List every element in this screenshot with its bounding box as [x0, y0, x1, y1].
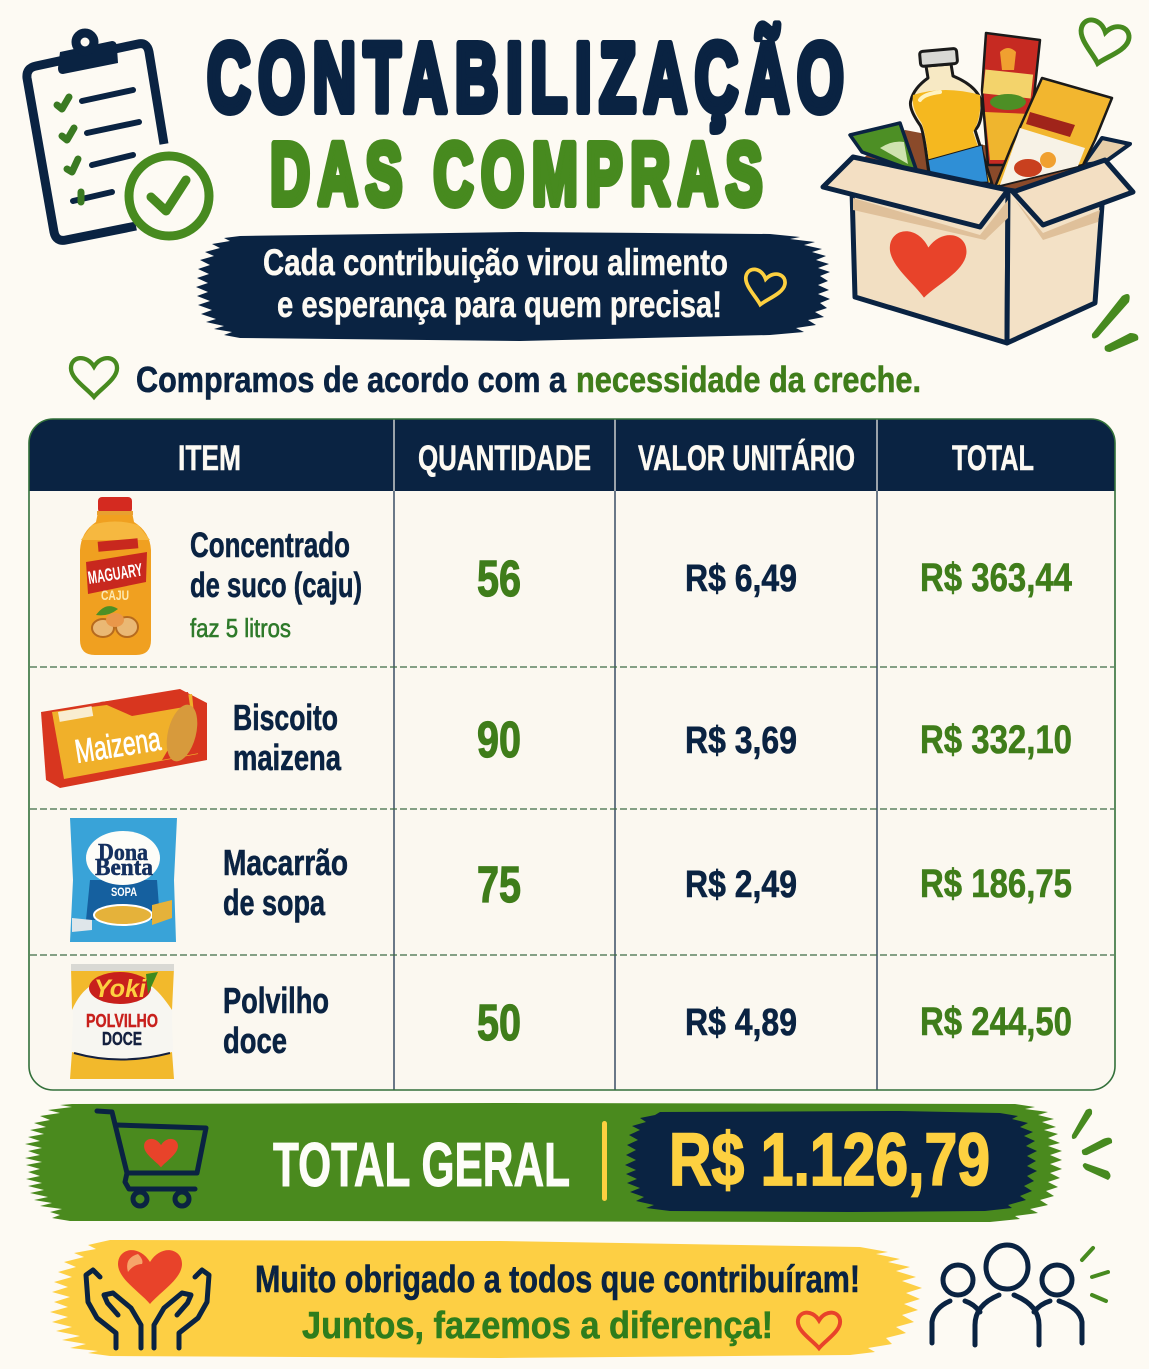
row: polvilho doce: R$ 4,89 [685, 1002, 797, 1044]
panel: thanks banner [50, 1240, 922, 1358]
total value: R$ 1.126,79 [669, 1118, 990, 1201]
row: macarrão de sopa: R$ 2,49 [685, 864, 797, 906]
title [207, 23, 844, 223]
icon: green sparks by total [1072, 1109, 1112, 1180]
row: macarrão de sopa [70, 818, 1072, 942]
table header: TOTAL [952, 439, 1034, 478]
icon: red outline heart [798, 1313, 840, 1348]
red bag [982, 33, 1040, 165]
icon: yellow heart [741, 268, 787, 309]
product: Yoki bag: POLVILHO [86, 1011, 158, 1031]
product: Maguary bottle: CAJU [101, 587, 129, 603]
icon: small green sparks [1082, 1248, 1108, 1301]
icon: group of people [932, 1245, 1108, 1345]
row: biscoito maizena: Biscoito [233, 697, 338, 738]
yellow bag [995, 78, 1112, 187]
title: DAS COMPRAS [270, 126, 762, 223]
panel: grand total: TOTAL GERAL [273, 1131, 570, 1200]
panel: thanks banner: Muito obrigado a todos que contribuíram! [255, 1259, 860, 1301]
row: polvilho doce [70, 964, 1072, 1079]
banner: subtitle: Cada contribuição virou alimento [263, 242, 728, 283]
product: Dona Benta bag: SOPA [111, 885, 137, 899]
banner: subtitle [196, 232, 830, 341]
icon: clipboard checklist [27, 33, 209, 240]
flaps [853, 198, 1008, 240]
product: Dona Benta bag: Dona [98, 840, 148, 866]
product: Maguary bottle [80, 497, 151, 655]
row: concentrado de suco: R$ 363,44 [920, 556, 1073, 600]
icon: hands holding heart [86, 1250, 209, 1348]
icon: shopping cart [97, 1111, 206, 1206]
row: macarrão de sopa: Macarrão [223, 842, 348, 883]
box faces [852, 190, 1008, 343]
back flap [1083, 138, 1130, 165]
table header: ITEM [178, 439, 241, 478]
subheading [136, 359, 921, 400]
icon: green outline heart [1074, 18, 1131, 69]
row: polvilho doce: 50 [477, 994, 521, 1051]
panel: purchases table [29, 419, 1115, 1090]
row: concentrado de suco: de suco (caju) [190, 566, 362, 605]
green pack [850, 123, 917, 172]
product: Maizena box [41, 689, 207, 788]
panel: thanks banner: Juntos, fazemos a diferença! [302, 1305, 773, 1347]
table header: QUANTIDADE [418, 439, 591, 478]
row: biscoito maizena: maizena [233, 737, 342, 778]
row: polvilho doce: R$ 244,50 [920, 1000, 1072, 1044]
total value [625, 1111, 1037, 1212]
row: macarrão de sopa: de sopa [223, 882, 326, 923]
row: polvilho doce: Polvilho [223, 980, 329, 1021]
row: biscoito maizena: R$ 332,10 [920, 718, 1072, 762]
product: Dona Benta bag [70, 818, 177, 942]
row: biscoito maizena: R$ 3,69 [685, 720, 797, 762]
row: concentrado de suco: Concentrado [190, 526, 350, 565]
product: Maguary bottle: MAGUARY [86, 560, 144, 588]
row: concentrado de suco: 56 [477, 550, 521, 607]
product: Dona Benta bag: Benta [95, 855, 153, 881]
banner: subtitle: e esperança para quem precisa! [277, 284, 722, 325]
table header: VALOR UNITÁRIO [638, 438, 855, 478]
subheading: necessidade da creche. [576, 359, 921, 400]
icon: donation box with groceries [823, 33, 1133, 343]
oil bottle [910, 48, 992, 184]
row: macarrão de sopa: R$ 186,75 [920, 862, 1072, 906]
icon: green sparks by box [1092, 294, 1138, 352]
title: CONTABILIZAÇÃO [207, 23, 844, 133]
row: macarrão de sopa: 75 [477, 856, 521, 913]
row: polvilho doce: doce [223, 1020, 287, 1061]
product: Yoki bag: Yoki [94, 975, 147, 1003]
row: concentrado de suco: faz 5 litros [190, 613, 291, 643]
product: Maizena box: Maizena [72, 720, 163, 770]
icon: green heart [71, 358, 117, 397]
row: biscoito maizena: 90 [477, 711, 521, 768]
table header [178, 438, 1034, 478]
icon: red heart on box [886, 230, 968, 301]
panel: grand total [25, 1103, 1062, 1222]
subheading: Compramos de acordo com a [136, 359, 567, 400]
row: biscoito maizena [41, 689, 1072, 788]
row: concentrado de suco: R$ 6,49 [685, 558, 797, 600]
row: concentrado de suco [80, 497, 1073, 655]
product: Yoki bag: DOCE [102, 1029, 142, 1049]
product: Yoki bag [70, 964, 174, 1079]
